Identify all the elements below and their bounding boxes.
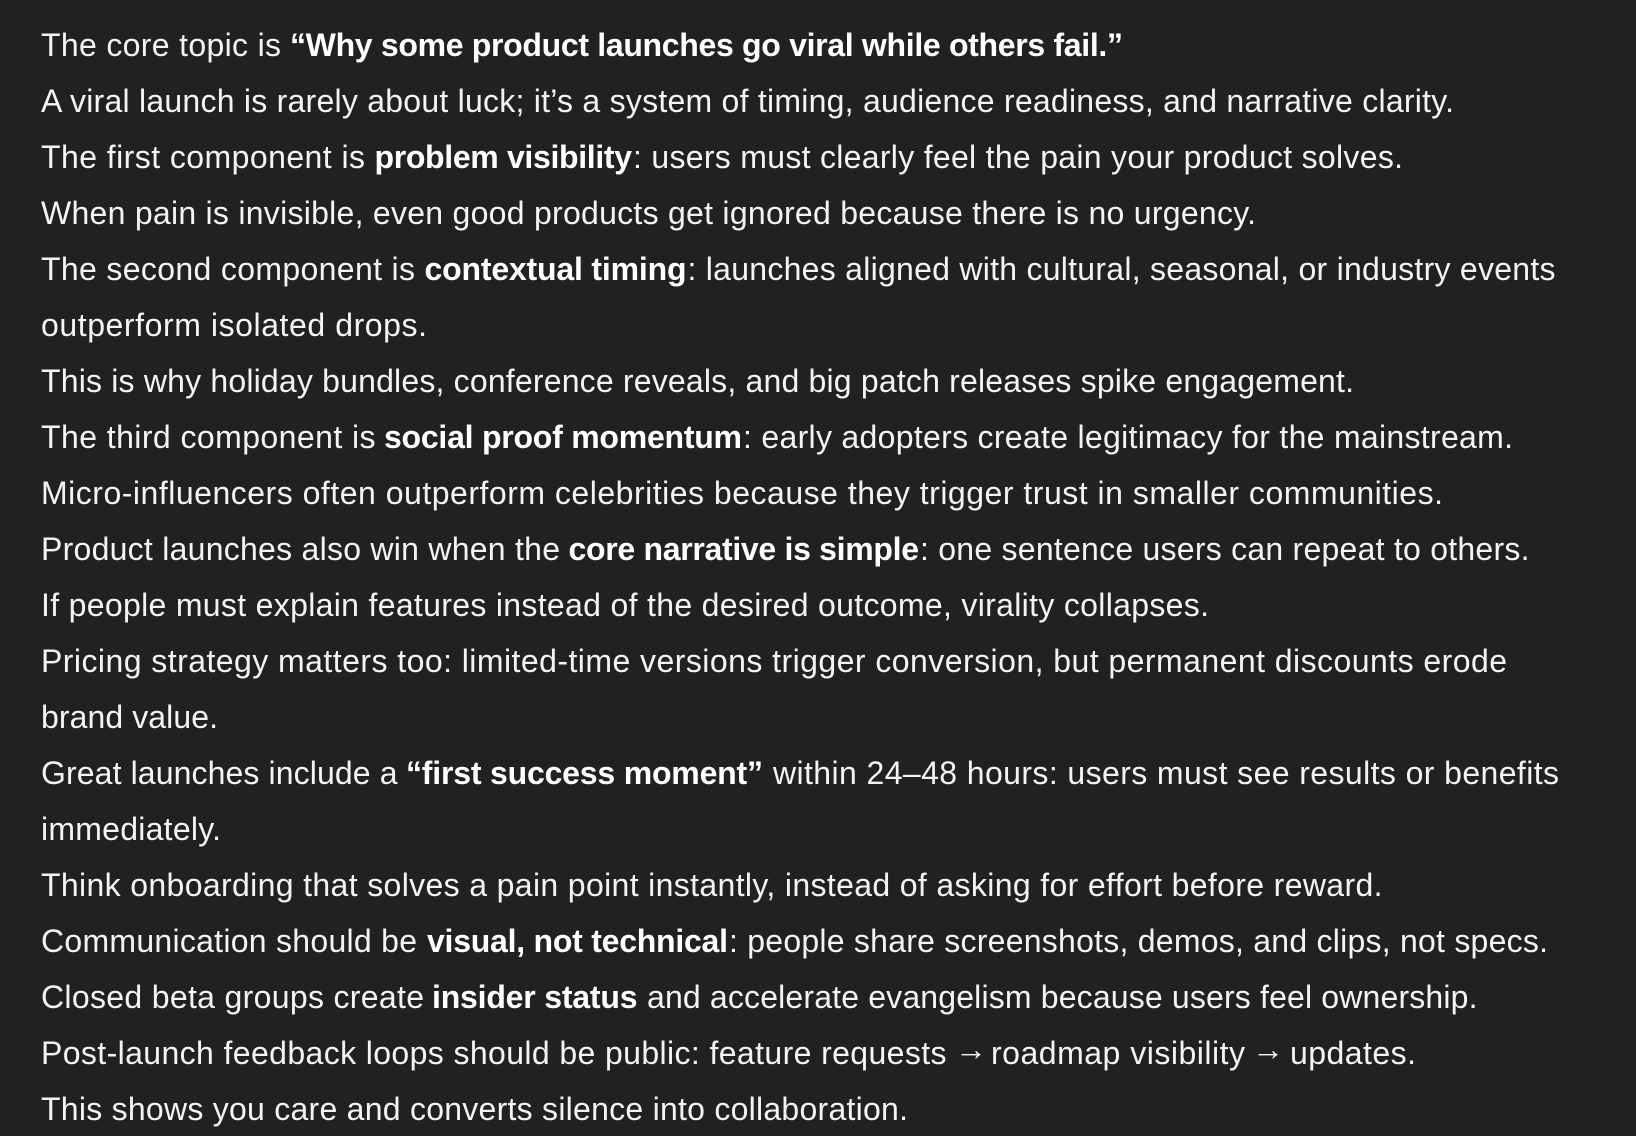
- line 5: contextual timing: [41, 251, 1556, 287]
- line 10: simple core narrative: core narrative is simple: [568, 531, 919, 567]
- line 19: public feedback loops: roadmap visibility: [991, 1035, 1245, 1071]
- line 16: onboarding: Think onboarding that solves a pain point instantly, instead of asking for effort before reward.: [41, 867, 1382, 903]
- line 5: contextual timing: : launches aligned with cultural, seasonal, or industry events: [688, 251, 1556, 287]
- line 14: first success moment: “first success moment”: [406, 755, 763, 791]
- line 3: problem visibility: [41, 139, 1403, 175]
- line 19: public feedback loops: →: [1252, 1031, 1284, 1067]
- line 19: public feedback loops: →: [955, 1031, 987, 1067]
- line 18: insider status: Closed beta groups create: [41, 979, 424, 1015]
- line 3: problem visibility: problem visibility: [374, 139, 632, 175]
- line 3: problem visibility: The first component is: [41, 139, 365, 175]
- line 18: insider status: [41, 979, 1478, 1015]
- line 6: isolated drops: outperform isolated drops.: [41, 307, 427, 343]
- line 5: contextual timing: The second component is: [41, 251, 415, 287]
- line 13: brand value: brand value.: [41, 699, 218, 735]
- line 1: core topic: “Why some product launches go viral while others fail.”: [290, 27, 1123, 63]
- line 4: invisible pain: When pain is invisible, even good products get ignored because there is no urgency.: [41, 195, 1256, 231]
- line 17: visual communication: Communication should be: [41, 923, 417, 959]
- line 3: problem visibility: : users must clearly feel the pain your product solves.: [633, 139, 1403, 175]
- line 7: engagement spikes: This is why holiday bundles, conference reveals, and big patch releases spike engagement.: [41, 363, 1354, 399]
- line 11: virality collapses: If people must explain features instead of the desired outcome, virality collapses.: [41, 587, 1209, 623]
- line 14: first success moment: [41, 755, 1559, 791]
- line 19: public feedback loops: updates.: [1290, 1035, 1416, 1071]
- line 5: contextual timing: contextual timing: [424, 251, 686, 287]
- line 8: social proof momentum: social proof momentum: [384, 419, 742, 455]
- line 8: social proof momentum: [41, 419, 1513, 455]
- line 19: public feedback loops: [41, 1031, 1416, 1071]
- line 17: visual communication: visual, not technical: [427, 923, 728, 959]
- line 14: first success moment: within 24–48 hours: users must see results or benefits: [772, 755, 1559, 791]
- line 12: pricing strategy: Pricing strategy matters too: limited-time versions trigger conversion, but permanent discounts erode: [41, 643, 1507, 679]
- line 10: simple core narrative: Product launches also win when the: [41, 531, 560, 567]
- line 18: insider status: insider status: [432, 979, 638, 1015]
- line 17: visual communication: : people share screenshots, demos, and clips, not specs.: [729, 923, 1548, 959]
- line 8: social proof momentum: The third component is: [41, 419, 376, 455]
- line 14: first success moment: Great launches include a: [41, 755, 398, 791]
- line 15: immediately: immediately.: [41, 811, 221, 847]
- line 1: core topic: The core topic is: [41, 27, 281, 63]
- line 19: public feedback loops: Post-launch feedback loops should be public: feature requests: [41, 1035, 946, 1071]
- line 20: collaboration: This shows you care and converts silence into collaboration.: [41, 1091, 908, 1127]
- line 17: visual communication: [41, 923, 1548, 959]
- line 2: system statement: A viral launch is rarely about luck; it’s a system of timing, audience readiness, and narrative clarity.: [41, 83, 1454, 119]
- line 10: simple core narrative: [41, 531, 1530, 567]
- line 9: micro-influencers: Micro-influencers often outperform celebrities because they trigger trust in smaller communities.: [41, 475, 1443, 511]
- line 10: simple core narrative: : one sentence users can repeat to others.: [920, 531, 1530, 567]
- line 18: insider status: and accelerate evangelism because users feel ownership.: [647, 979, 1478, 1015]
- line 8: social proof momentum: : early adopters create legitimacy for the mainstream.: [743, 419, 1513, 455]
